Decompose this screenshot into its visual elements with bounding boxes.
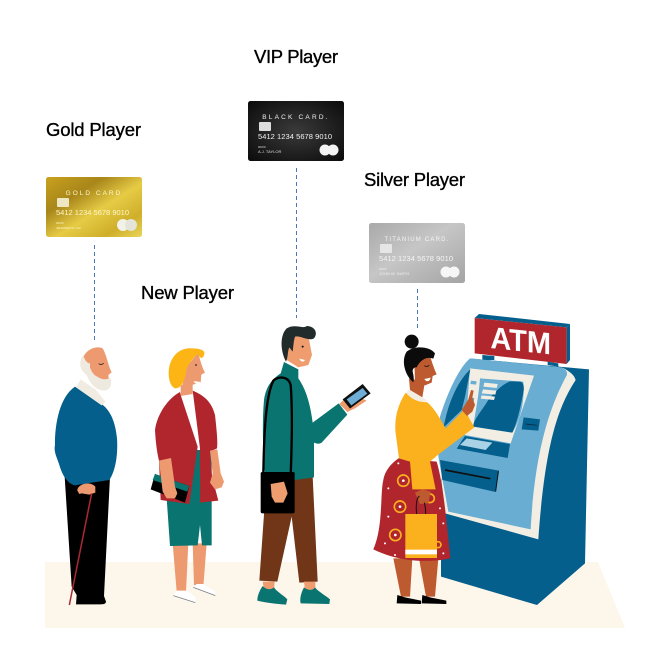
- card: black: 5412 1234 5678 9010: [258, 132, 332, 141]
- screen recess: [444, 369, 470, 427]
- trousers and shoes: [65, 477, 110, 604]
- card: titanium silver: 5412 1234 5678 9010: [379, 254, 453, 263]
- hand: [77, 484, 95, 495]
- ankles: [263, 582, 315, 590]
- blue front panel: [438, 358, 567, 529]
- hair: [282, 326, 316, 362]
- connector: silver card to woman: [416, 289, 418, 330]
- card: gold: JENNIFER M. LIM: [56, 226, 81, 230]
- collar: [76, 379, 105, 405]
- screen surround: [465, 368, 534, 443]
- screen: [473, 378, 524, 433]
- skirt: [167, 447, 212, 546]
- figure: woman at ATM: [373, 335, 475, 604]
- hair: [169, 348, 204, 388]
- head: [83, 347, 112, 385]
- top: [395, 393, 474, 489]
- card: titanium silver: 00/00: [379, 267, 387, 271]
- card: gold: 00/00: [56, 221, 64, 225]
- atm sign: [475, 314, 570, 367]
- hair: [405, 335, 419, 349]
- back hair: [80, 355, 90, 373]
- card: black: BLACK CARD.: [262, 114, 330, 121]
- keypad: [457, 436, 510, 458]
- heading: VIP Player: VIP Player: [254, 46, 338, 67]
- sweater: [263, 362, 347, 483]
- card: titanium silver: [369, 223, 465, 283]
- pointing hand: [462, 390, 475, 416]
- arms: [159, 458, 177, 498]
- hand: [271, 482, 288, 503]
- cane: [69, 493, 92, 605]
- card: black: A.J. TAYLOR: [258, 149, 281, 154]
- card: titanium silver: JOHN W. SMITH: [379, 271, 409, 276]
- collar: [406, 389, 428, 403]
- shoes: [257, 586, 330, 605]
- cream trim: [438, 359, 576, 539]
- screen buttons: [481, 383, 498, 400]
- skirt flowers: [390, 475, 441, 548]
- card: gold: 5412 1234 5678 9010: [56, 208, 129, 217]
- shoes: [397, 595, 446, 604]
- top: [181, 394, 201, 450]
- heading: Silver Player: Silver Player: [364, 169, 465, 190]
- card: black: [248, 101, 344, 161]
- heading: New Player: New Player: [141, 282, 234, 303]
- connector: gold card to old man: [94, 245, 96, 342]
- connector: black card to man: [296, 168, 298, 318]
- clutch: [151, 474, 189, 503]
- jacket: [155, 392, 198, 504]
- card: titanium silver: TITANIUM CARD.: [384, 237, 450, 243]
- sweater: [55, 387, 117, 485]
- neck and head: [409, 378, 425, 397]
- smile: [194, 381, 201, 384]
- shoes: [173, 584, 215, 603]
- figure: old man with cane: [55, 347, 117, 605]
- cabinet: [441, 359, 589, 605]
- hand holding bag: [415, 489, 431, 504]
- phone: [343, 384, 371, 409]
- card slot: [522, 417, 540, 431]
- ATM machine: [438, 314, 589, 605]
- trousers: [259, 477, 318, 583]
- shopping bag: [416, 496, 426, 514]
- skirt: [373, 458, 450, 561]
- card: gold: GOLD CARD: [66, 190, 122, 197]
- cash tray: [440, 460, 499, 492]
- eye: [99, 363, 104, 364]
- bag: [261, 472, 295, 513]
- figure: woman in red jacket: [151, 348, 224, 603]
- neck and head: [181, 383, 193, 397]
- bag strap: [263, 378, 292, 475]
- beard: [85, 367, 111, 391]
- legs: [393, 558, 438, 597]
- atm sign: ATM: [490, 320, 551, 361]
- card: gold: [46, 177, 142, 237]
- card: black: 00/00: [258, 145, 266, 149]
- neck and face: [285, 334, 312, 367]
- legs: [173, 543, 207, 592]
- heading: Gold Player: Gold Player: [46, 119, 141, 140]
- smile: [299, 359, 305, 362]
- floor: [45, 562, 625, 628]
- hand with phone: [339, 393, 367, 412]
- figure: man with phone and bag: [257, 326, 371, 605]
